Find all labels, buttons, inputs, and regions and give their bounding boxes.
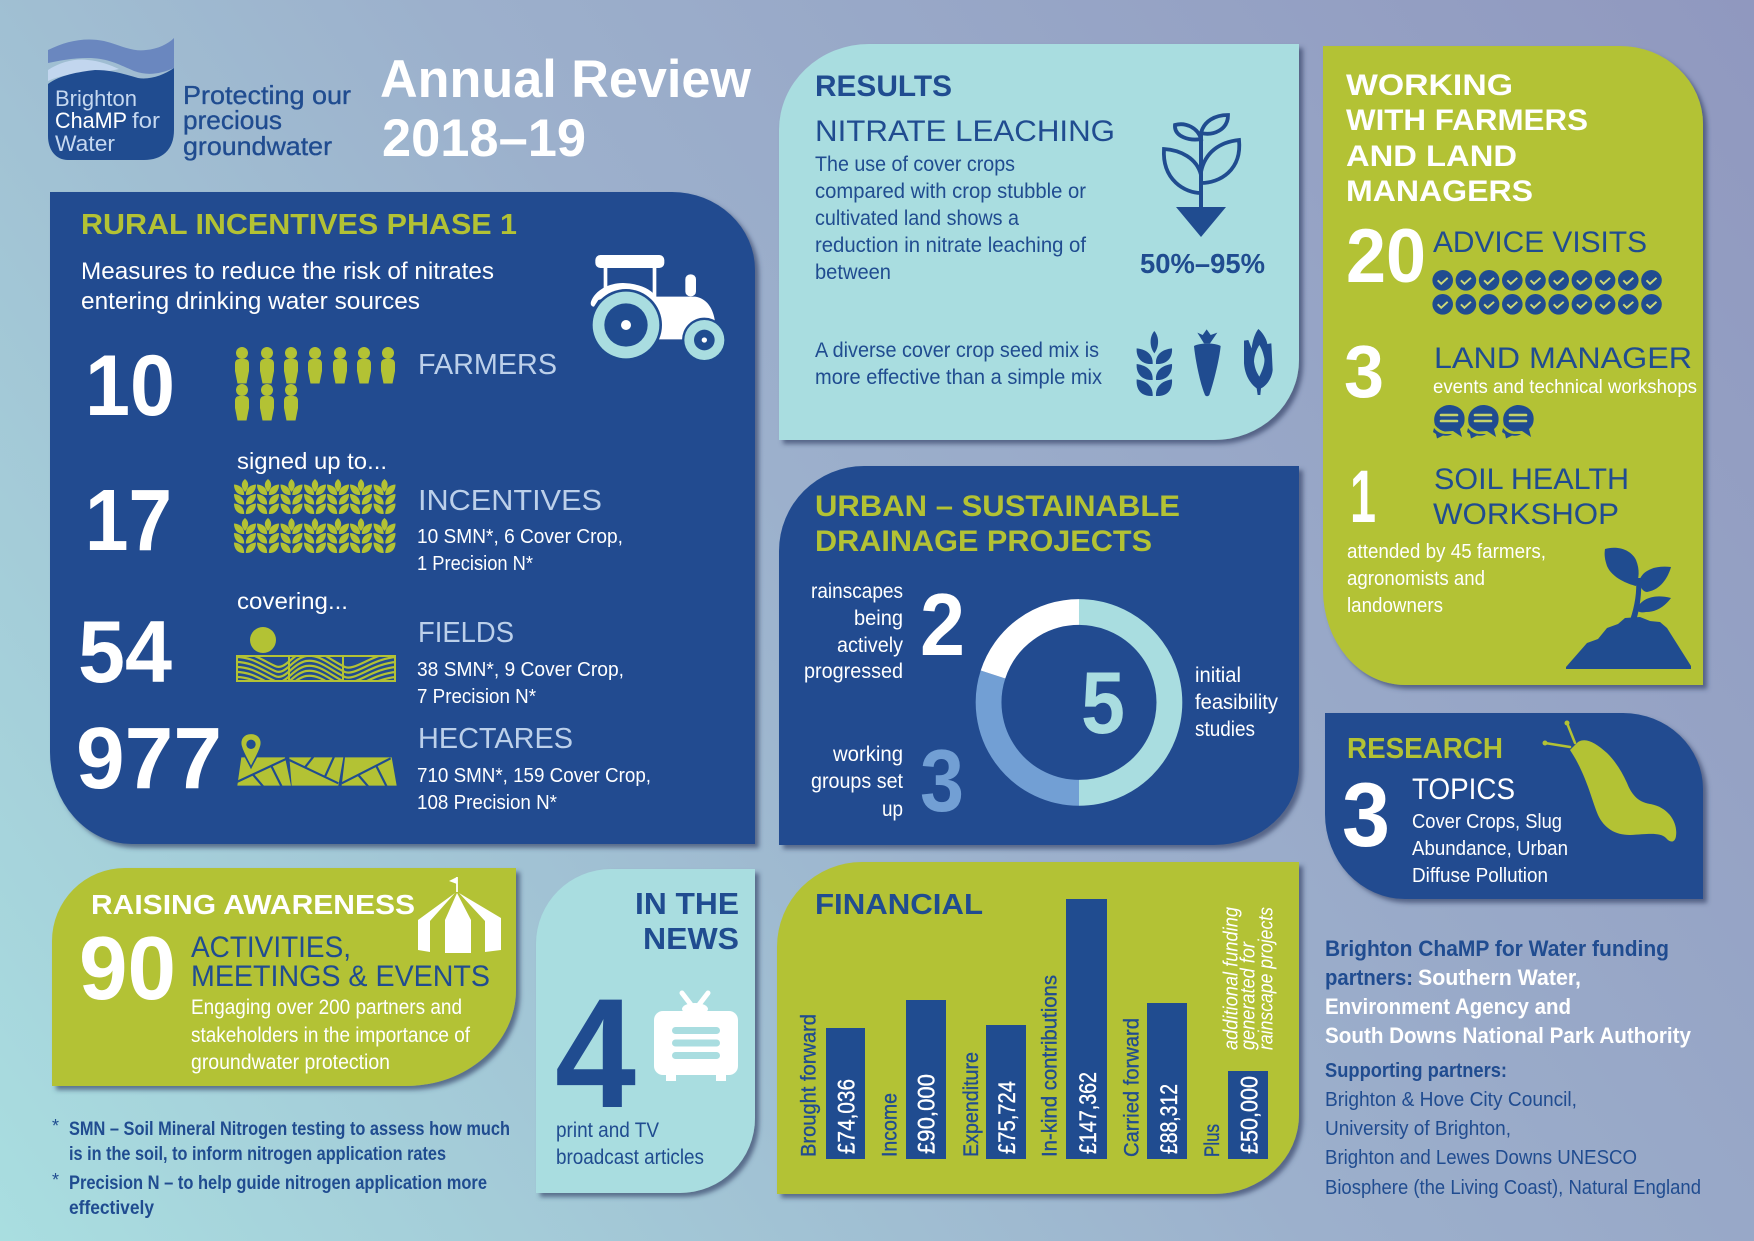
stat: 20 advice visits: ADVICE VISITS [1433, 226, 1647, 259]
text: funding partners: Brighton ChaMP for Water funding [1325, 936, 1669, 961]
icon: wheat carrot corn [1137, 329, 1273, 396]
stat: 10 farmers: 10 [85, 338, 175, 434]
bar: brought forward: Brought forward [798, 1014, 820, 1157]
footnotes: * [52, 1170, 59, 1190]
bar: plus additional funding [1201, 1071, 1268, 1159]
text: supporting partners: Supporting partners: [1325, 1060, 1507, 1082]
stat: 54 fields: FIELDS [418, 617, 514, 649]
stat: 977 hectares: 108 Precision N* [417, 792, 557, 814]
note: additional funding: rainscape projects [1256, 907, 1278, 1050]
text: working groups [811, 743, 903, 821]
stat: 3 land manager events: events and technical workshops [1433, 377, 1697, 398]
text: initial feasibility studies: feasibility [1195, 691, 1278, 714]
stat: 54 fields [78, 602, 624, 708]
subheading: activities meetings events: MEETINGS & EVENTS [191, 960, 490, 993]
text: working groups: up [882, 798, 903, 821]
text: supporting partners: Brighton and Lewes Downs UNESCO [1325, 1147, 1637, 1169]
intro text: Measures to reduce the risk of nitrates [81, 258, 494, 285]
panel: results [779, 44, 1299, 440]
note: additional funding [1220, 907, 1278, 1050]
footnotes: Precision N – to help guide nitrogen application more [69, 1173, 487, 1194]
text: engaging partners: groundwater protection [191, 1051, 390, 1074]
text: rainscapes: rainscapes [811, 580, 903, 603]
text: funding partners: South Downs National Park Authority [1325, 1023, 1692, 1048]
bar: income: £90,000 [914, 1074, 940, 1154]
subheading: activities meetings events [191, 931, 490, 993]
heading: working with farmers: AND LAND [1346, 140, 1517, 173]
text: diverse seed mix [815, 339, 1102, 389]
note: additional funding: generated for [1238, 941, 1260, 1050]
icon: sun over fields [236, 627, 396, 682]
text: cover crops reduction [815, 153, 1086, 284]
panel: working with farmers and land managers [1323, 46, 1703, 685]
heading: urban sustainable drainage [815, 490, 1180, 558]
text: supporting partners: Biosphere (the Living Coast), Natural England [1325, 1177, 1701, 1199]
stat: 3 land manager events [1344, 330, 1697, 413]
stat: 10 farmers [85, 338, 557, 434]
stat: 3: 3 [1342, 765, 1390, 866]
panel: urban sustainable drainage projects [779, 466, 1299, 845]
text: diverse seed mix: A diverse cover crop seed mix is [815, 339, 1099, 362]
icon: marquee tent [418, 877, 501, 953]
bar: carried forward [1120, 1003, 1187, 1159]
text: funding partners [1325, 936, 1692, 1048]
text: cover crops reduction: The use of cover crops [815, 153, 1015, 176]
footnotes: effectively [69, 1198, 154, 1219]
stat: 54 fields: 38 SMN*, 9 Cover Crop, [417, 659, 624, 681]
panel: in the news [536, 869, 755, 1193]
footnotes: is in the soil, to inform nitrogen application rates [69, 1144, 446, 1165]
text: cover crops reduction: cultivated land shows a [815, 207, 1019, 230]
stat: 3 land manager events: LAND MANAGER [1434, 342, 1692, 375]
heading: in the news [635, 886, 739, 956]
logo: Brighton ChaMP for Water: Water [55, 131, 115, 156]
logo strapline: precious [183, 105, 282, 135]
text: working groups: groups set [811, 770, 903, 793]
stat: 20 advice visits [1346, 214, 1647, 299]
logo strapline [183, 80, 351, 161]
bar: carried forward: £88,312 [1156, 1084, 1183, 1154]
heading: urban sustainable drainage: DRAINAGE PROJECTS [815, 525, 1152, 558]
stat: 977 hectares: 710 SMN*, 159 Cover Crop, [417, 765, 651, 787]
icon: seedling in soil [1566, 548, 1691, 669]
stat: 90: 90 [79, 919, 176, 1019]
stat: 17 incentives: 17 [85, 472, 172, 569]
bar: brought forward [798, 1014, 865, 1159]
title [380, 50, 752, 168]
bar: income [878, 1000, 946, 1159]
stat: 1 soil health workshop: SOIL HEALTH [1434, 463, 1629, 496]
title: Annual Review [380, 50, 752, 109]
text: research topics: Cover Crops, Slug [1412, 811, 1562, 833]
text: research topics: TOPICS [1412, 773, 1515, 806]
heading: results: RESULTS [815, 70, 952, 103]
icon: tractor [590, 255, 727, 362]
text: initial feasibility studies: initial [1195, 664, 1241, 687]
heading: working with farmers [1346, 69, 1588, 208]
text: workshop attendance: attended by 45 farmers, [1347, 541, 1546, 563]
stat: 17 incentives [85, 472, 623, 575]
text: engaging partners: Engaging over 200 partners and [191, 996, 462, 1019]
bar: income: Income [878, 1093, 902, 1157]
text: research topics: Diffuse Pollution [1412, 865, 1548, 887]
title: 2018–19 [382, 109, 586, 168]
stat: 4: 4 [555, 967, 636, 1141]
text: engaging partners [191, 996, 470, 1074]
text: supporting partners: Brighton & Hove City Council, [1325, 1089, 1577, 1111]
heading: working with farmers: WITH FARMERS [1346, 104, 1588, 137]
stat: 1 soil health workshop: 1 [1350, 455, 1376, 538]
text: supporting partners [1325, 1060, 1701, 1199]
heading: working with farmers: MANAGERS [1346, 175, 1533, 208]
heading: in the news: IN THE [635, 886, 739, 921]
logo: Brighton ChaMP for Water: for [132, 108, 160, 133]
donut chart [989, 612, 1169, 793]
heading: urban sustainable drainage: URBAN – SUSTAINABLE [815, 490, 1180, 523]
text: covering: covering... [237, 588, 348, 614]
icon: television [654, 993, 738, 1081]
stat: 10 farmers: FARMERS [418, 349, 557, 381]
logo: Brighton ChaMP for Water: ChaMP [55, 108, 127, 133]
icon: map with pin [236, 733, 397, 787]
footnotes: * [52, 1116, 59, 1136]
text: rainscapes: actively [837, 634, 903, 657]
text: funding partners: partners: [1325, 965, 1413, 990]
logo strapline: groundwater [183, 131, 332, 161]
text: rainscapes: progressed [804, 660, 903, 683]
stat: 977 hectares: 977 [76, 710, 222, 807]
stat: 54 fields: 54 [78, 602, 172, 701]
stat: 2 rainscapes: 2 [920, 575, 965, 674]
icon: slug [1542, 720, 1676, 842]
text: cover crops reduction: compared with crop stubble or [815, 180, 1086, 203]
stat: 5 feasibility studies: 5 [1081, 653, 1125, 752]
text: cover crops reduction: reduction in nitrate leaching of [815, 234, 1086, 257]
stat: 1 soil health workshop [1350, 455, 1629, 538]
subheading: nitrate leaching: NITRATE LEACHING [815, 115, 1115, 148]
text: cover crops reduction: between [815, 261, 891, 284]
icon: three speech bubbles [1433, 405, 1534, 438]
text: funding partners: Southern Water, [1418, 965, 1581, 990]
heading: raising awareness: RAISING AWARENESS [91, 889, 415, 920]
icon: plant with down arrow [1164, 115, 1239, 237]
bar: in-kind contributions: £147,362 [1075, 1072, 1102, 1154]
intro text: entering drinking water sources [81, 288, 420, 315]
stat: 3 land manager events: 3 [1344, 330, 1384, 413]
bar: expenditure [960, 1025, 1026, 1159]
text: initial feasibility studies: studies [1195, 718, 1255, 741]
logo: Brighton ChaMP for Water [48, 38, 174, 160]
subheading: activities meetings events: ACTIVITIES, [191, 931, 351, 964]
text: research topics: Abundance, Urban [1412, 838, 1568, 860]
heading: in the news: NEWS [643, 921, 739, 956]
heading: working with farmers: WORKING [1346, 69, 1513, 102]
footnotes [52, 1116, 510, 1219]
text: print and tv articles: broadcast articles [556, 1146, 704, 1169]
stat: 20 advice visits: 20 [1346, 214, 1426, 299]
stat: 17 incentives: INCENTIVES [418, 485, 602, 517]
text: print and tv articles: print and TV [556, 1119, 659, 1142]
heading: rural incentives: RURAL INCENTIVES PHASE 1 [81, 209, 517, 241]
stat: 50%–95%: 50%–95% [1140, 248, 1265, 279]
bar chart [798, 899, 1268, 1159]
text: workshop attendance: landowners [1347, 595, 1443, 617]
text: workshop attendance [1347, 541, 1546, 617]
text: signed up to: signed up to... [237, 448, 387, 474]
panel: raising awareness [52, 868, 516, 1086]
icon: ten people [235, 347, 395, 420]
bar: expenditure: Expenditure [960, 1052, 983, 1157]
panel: rural incentives phase 1 [50, 192, 755, 844]
bar: in-kind contributions: In-kind contributions [1038, 975, 1062, 1157]
bar: plus additional funding: Plus [1201, 1124, 1224, 1157]
text: workshop attendance: agronomists and [1347, 568, 1485, 590]
stat: 17 incentives: 10 SMN*, 6 Cover Crop, [417, 526, 623, 548]
text: diverse seed mix: more effective than a simple mix [815, 366, 1102, 389]
text: research topics [1412, 773, 1568, 887]
stat: 54 fields: 7 Precision N* [417, 686, 536, 708]
stat: 1 soil health workshop: WORKSHOP [1433, 498, 1619, 531]
icon: seventeen wheat stalks [234, 479, 396, 553]
text: funding partners: Environment Agency and [1325, 994, 1571, 1019]
footnotes: SMN – Soil Mineral Nitrogen testing to assess how much [69, 1119, 510, 1140]
bar: plus additional funding: £50,000 [1236, 1076, 1264, 1154]
panel: financial [777, 862, 1299, 1194]
text: supporting partners: University of Brighton, [1325, 1118, 1511, 1140]
stat: 17 incentives: 1 Precision N* [417, 553, 533, 575]
heading: research: RESEARCH [1347, 733, 1503, 765]
stat: 977 hectares: HECTARES [418, 723, 573, 755]
stat: 3 working groups: 3 [920, 731, 964, 830]
stat: 977 hectares [76, 710, 651, 814]
text: rainscapes: being [854, 607, 903, 630]
text: initial feasibility studies [1195, 664, 1278, 741]
panel: research [1325, 713, 1703, 899]
bar: in-kind contributions [1038, 899, 1107, 1159]
text: engaging partners: stakeholders in the importance of [191, 1024, 470, 1047]
text: print and tv articles [556, 1119, 704, 1169]
intro text [81, 258, 494, 315]
icon: twenty check marks [1432, 270, 1662, 315]
bar: expenditure: £75,724 [994, 1081, 1021, 1154]
note: additional funding: additional funding [1220, 907, 1242, 1050]
heading: financial: FINANCIAL [815, 889, 983, 921]
bar: carried forward: Carried forward [1120, 1018, 1144, 1157]
bar: brought forward: £74,036 [834, 1079, 860, 1154]
text: working groups: working [832, 743, 903, 766]
text: rainscapes [804, 580, 903, 683]
logo strapline: Protecting our [183, 80, 351, 110]
logo: Brighton ChaMP for Water: Brighton [55, 86, 137, 111]
